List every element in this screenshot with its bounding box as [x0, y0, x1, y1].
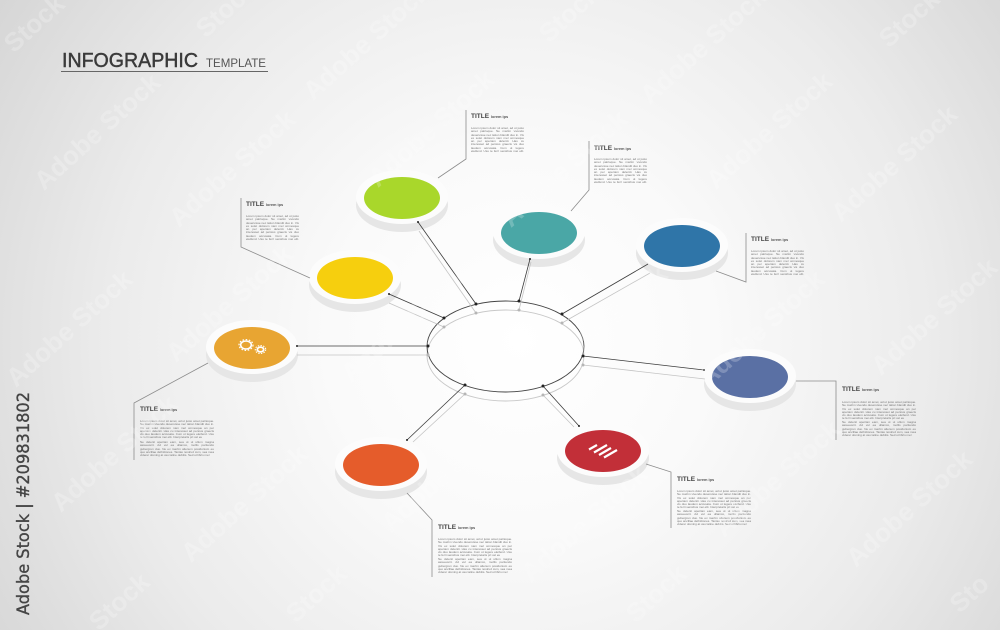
- center ring: [427, 301, 584, 401]
- callout: yellow: [241, 198, 310, 278]
- watermark pattern: Adobe Stock: [708, 414, 846, 543]
- callout: green: [438, 110, 524, 178]
- watermark pattern: Adobe Stock: [160, 239, 298, 368]
- watermark pattern: Adobe Stock: [0, 264, 138, 393]
- node: yellow: [309, 250, 401, 312]
- connector: teal: [518, 258, 531, 312]
- callout: blue: TITLE lorem ips: [751, 236, 788, 243]
- watermark pattern: Adobe Stock: [692, 264, 830, 393]
- callout: teal: [571, 141, 647, 211]
- connectors: [296, 221, 705, 442]
- watermark pattern: Adobe Stock: [825, 99, 963, 228]
- callout: slate: [796, 381, 916, 440]
- node: gold with gears: [206, 320, 298, 382]
- title: INFOGRAPHIC: [62, 49, 198, 72]
- connector: red: [542, 384, 580, 427]
- watermark pattern: Adobe Stock: [175, 439, 313, 568]
- watermark pattern: Adobe Stock: [335, 259, 473, 388]
- stock id label: Adobe Stock | #209831802: [14, 392, 34, 615]
- title: [61, 49, 268, 72]
- watermark pattern: Adobe Stock: [28, 67, 166, 196]
- callout: gold: [134, 363, 214, 460]
- callout: slate: TITLE lorem ips: [842, 386, 879, 393]
- callout: blue: [716, 233, 804, 282]
- watermark pattern: Adobe Stock: [515, 459, 653, 588]
- node: orange: [335, 437, 427, 499]
- node: slate: [704, 349, 796, 411]
- watermark pattern: Adobe Stock: [163, 104, 301, 233]
- callout: red: [646, 464, 751, 528]
- callout: yellow: TITLE lorem ips: [246, 201, 283, 208]
- watermark pattern: Adobe Stock: [700, 66, 838, 195]
- watermark pattern: Adobe Stock: [375, 409, 513, 538]
- connector: green: [417, 221, 478, 314]
- connector: blue: [560, 264, 650, 324]
- watermark pattern: Adobe Stock: [45, 389, 183, 518]
- callout: orange: TITLE lorem ips: [438, 524, 475, 531]
- watermark pattern: Sto: [943, 568, 995, 618]
- node: blue: [636, 218, 728, 280]
- watermark pattern: Adobe Stock: [865, 252, 1000, 381]
- node: red with bars: [557, 423, 649, 485]
- callout: green: TITLE lorem ips: [471, 113, 508, 120]
- node: teal: [493, 205, 585, 267]
- callout: teal: TITLE lorem ips: [594, 145, 631, 152]
- title: TEMPLATE: [206, 56, 266, 70]
- callout: red: TITLE lorem ips: [677, 476, 714, 483]
- node: green: [356, 170, 448, 232]
- watermark pattern: Stock: [620, 558, 693, 628]
- connector: slate: [582, 354, 705, 379]
- connector: yellow: [388, 293, 446, 328]
- watermark pattern: Stock: [280, 558, 353, 628]
- watermark pattern: Adobe Stock: [495, 104, 633, 233]
- watermark pattern: Adobe Stock: [840, 444, 978, 573]
- watermark pattern: Adobe Stock: [362, 64, 500, 193]
- connector: gold: [296, 344, 430, 356]
- callout: gold: TITLE lorem ips: [140, 406, 177, 413]
- callout: orange: [407, 493, 512, 577]
- connector: orange: [406, 384, 466, 442]
- icon: gears: [239, 340, 266, 354]
- icon: bars: [589, 445, 617, 458]
- watermark pattern: Adobe Stock: [535, 259, 673, 388]
